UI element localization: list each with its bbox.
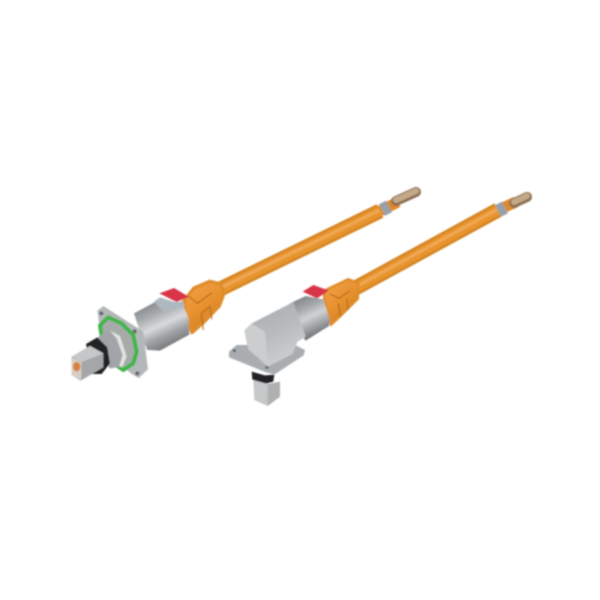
left connector (drawn in 3x coordinates) bbox=[72, 281, 224, 381]
left cable assembly bbox=[72, 191, 416, 381]
right connector (drawn in 3x coordinates) bbox=[229, 279, 358, 406]
right cable: orange sheath bbox=[350, 202, 516, 291]
square plug bbox=[253, 380, 280, 406]
right cable: grey band bbox=[498, 208, 505, 211]
inner silver body bbox=[97, 331, 125, 369]
right cable: copper tip bbox=[514, 196, 527, 203]
left cable: copper tip bbox=[396, 191, 416, 201]
orange housing bbox=[324, 279, 358, 325]
right cable assembly bbox=[229, 196, 527, 406]
black seal bbox=[252, 372, 274, 385]
square plug bbox=[72, 346, 103, 381]
left cable: orange sheath bbox=[208, 202, 398, 295]
silver shell bbox=[134, 302, 189, 351]
black ring bbox=[86, 337, 110, 374]
left cable: grey band bbox=[382, 206, 389, 210]
mounting plate bbox=[229, 345, 305, 375]
green seal ring bbox=[100, 317, 137, 370]
silver shell bbox=[290, 296, 330, 341]
silver elbow body bbox=[244, 302, 306, 367]
square flange bbox=[97, 306, 148, 378]
copper contact bbox=[73, 362, 80, 371]
orange housing bbox=[184, 281, 224, 333]
red latch bbox=[303, 285, 329, 298]
red latch bbox=[159, 288, 189, 302]
